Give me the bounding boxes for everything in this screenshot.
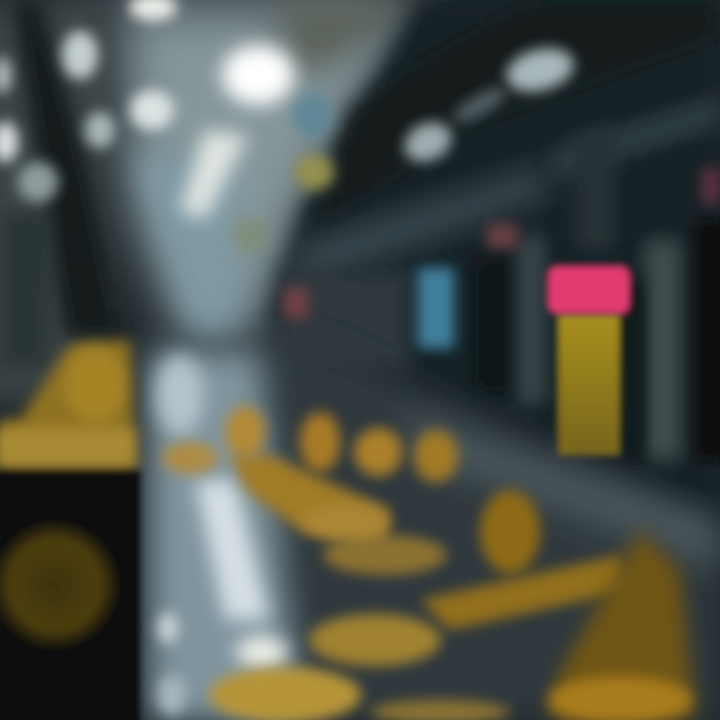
gold bars: near row (209, 490, 695, 720)
black box with gold coin emblem (0, 340, 141, 720)
ceiling lights (0, 0, 578, 253)
left wall: dark racks (0, 0, 125, 400)
gold bars: far row (162, 406, 458, 482)
gold bars: middle row (230, 455, 447, 575)
floor: grey aisle and right floor (140, 340, 720, 720)
background haze: ceiling and aisle (110, 0, 420, 340)
coloured boxes on shelves (284, 168, 720, 348)
right wall: dark structure (270, 0, 720, 520)
yellow column with pink top (548, 266, 630, 455)
